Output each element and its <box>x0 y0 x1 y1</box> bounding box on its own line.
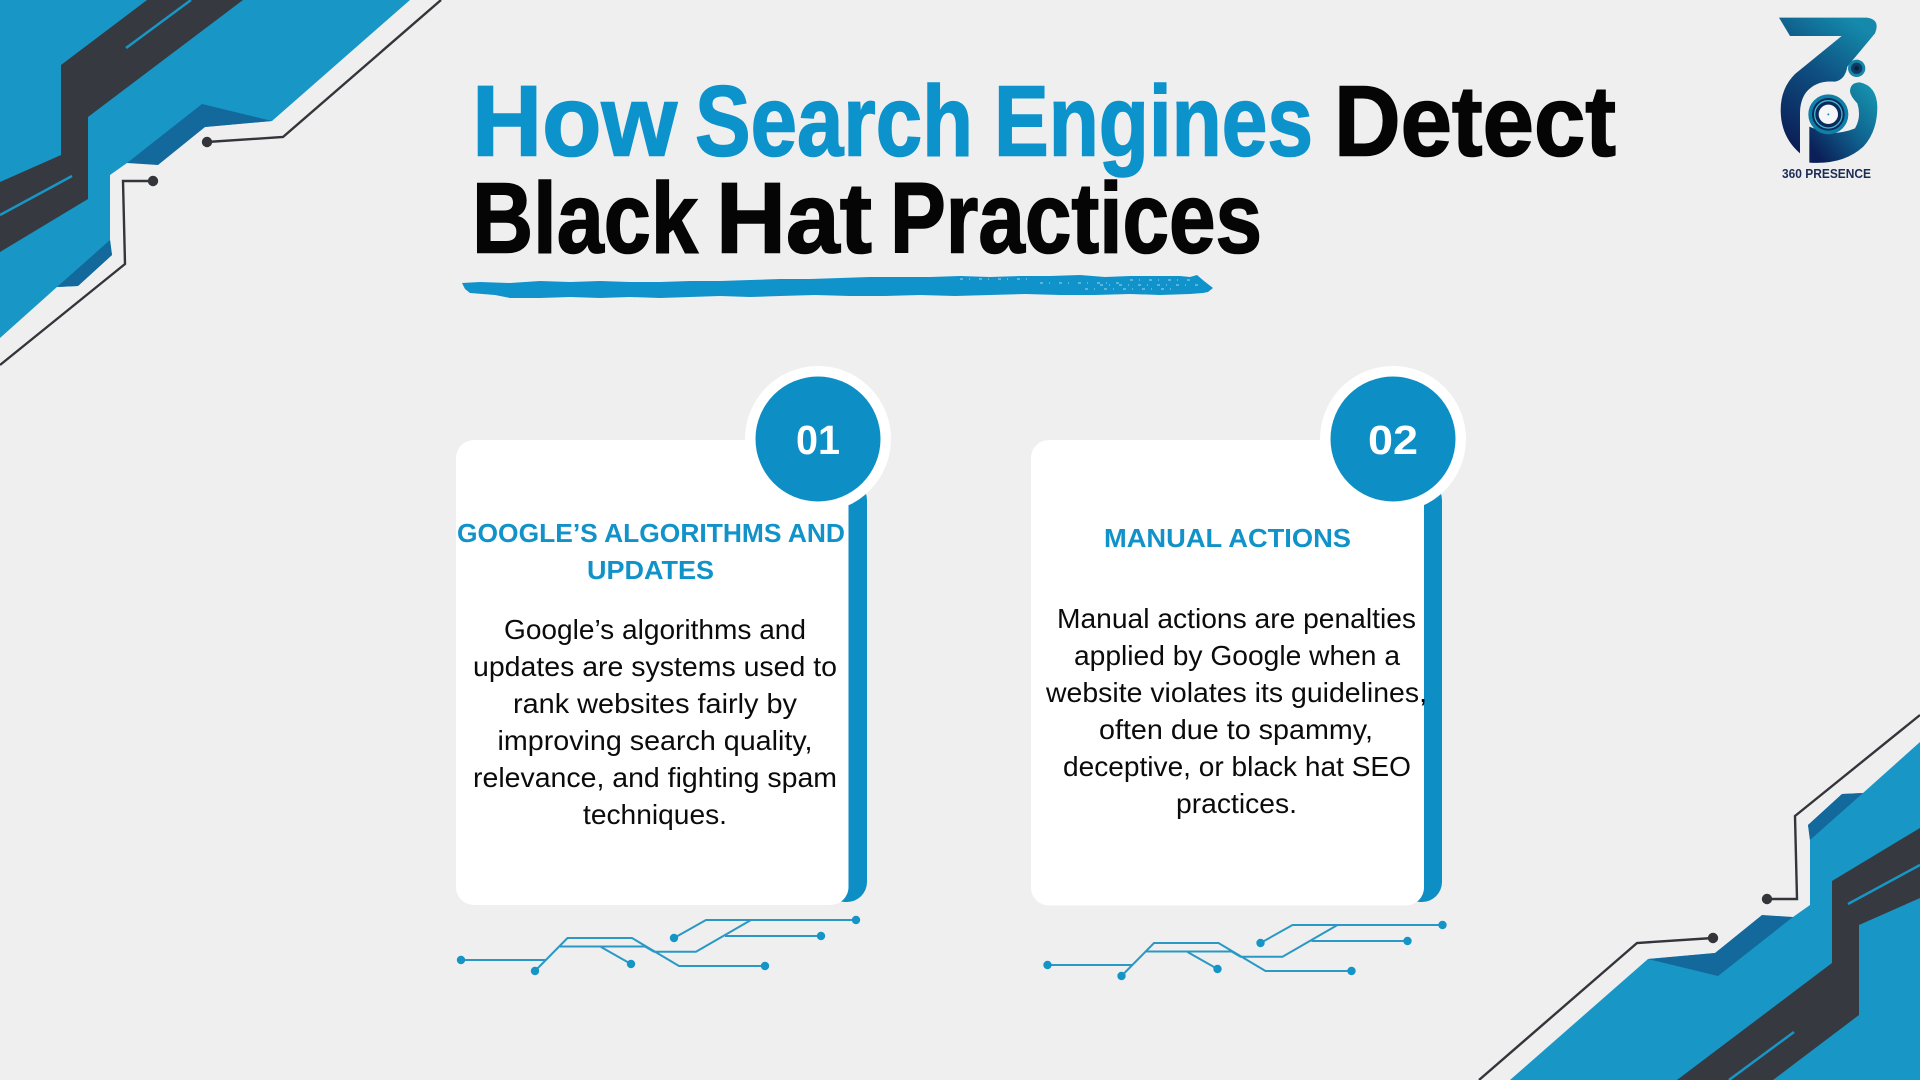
card 01 text: updates are systems used to <box>473 651 837 682</box>
card 01 heading: UPDATES <box>587 557 714 585</box>
card 01 side bar <box>825 480 867 902</box>
brush underline <box>462 275 1213 298</box>
card 02 text <box>1045 603 1427 819</box>
title line 2: Practices <box>890 162 1262 274</box>
logo mark <box>1779 18 1877 163</box>
title line 1 <box>472 66 1616 178</box>
title line 1: How <box>472 66 677 178</box>
card 01 body <box>456 440 848 905</box>
circuit graphic under card 02 <box>1043 921 1447 980</box>
title line 1: Engines <box>994 66 1313 178</box>
card 01 text: relevance, and fighting spam <box>473 762 837 793</box>
card 02 text: deceptive, or black hat SEO <box>1063 751 1411 782</box>
logo wordmark: 360 PRESENCE <box>1782 167 1871 181</box>
title <box>472 66 1616 274</box>
card 01 number badge: 01 <box>796 417 840 463</box>
card 02 body <box>1031 440 1424 906</box>
card 01 heading <box>457 520 845 585</box>
title line 2: Black <box>472 162 698 274</box>
card 01 text <box>473 614 837 830</box>
card 02 text: applied by Google when a <box>1074 640 1400 671</box>
card 02 number badge <box>1320 366 1466 512</box>
title line 2 <box>472 162 1262 274</box>
logo <box>1779 18 1877 181</box>
card 01 text: Google’s algorithms and <box>504 614 806 645</box>
card 02 text: practices. <box>1176 788 1297 819</box>
card 01 text: rank websites fairly by <box>513 688 797 719</box>
card 02 heading: MANUAL ACTIONS <box>1104 525 1351 553</box>
card 01 text: improving search quality, <box>498 725 812 756</box>
panel: card 01 <box>456 366 891 905</box>
title line 1: Search <box>695 66 973 178</box>
title line 1: Detect <box>1334 66 1616 178</box>
bottom-right corner decoration <box>1479 715 1920 1080</box>
card 02 side bar <box>1400 480 1442 902</box>
card 02 text: often due to spammy, <box>1099 714 1373 745</box>
circuit graphic under card 01 <box>457 916 860 975</box>
card 02 text: Manual actions are penalties <box>1057 603 1416 634</box>
panel: card 02 <box>1031 366 1466 906</box>
card 01 number badge <box>745 366 891 512</box>
card 01 heading: GOOGLE’S ALGORITHMS AND <box>457 520 845 548</box>
top-left corner decoration <box>0 0 441 365</box>
card 01 text: techniques. <box>583 799 727 830</box>
card 02 text: website violates its guidelines, <box>1045 677 1427 708</box>
title line 2: Hat <box>716 162 872 274</box>
card 02 number badge: 02 <box>1368 417 1418 463</box>
